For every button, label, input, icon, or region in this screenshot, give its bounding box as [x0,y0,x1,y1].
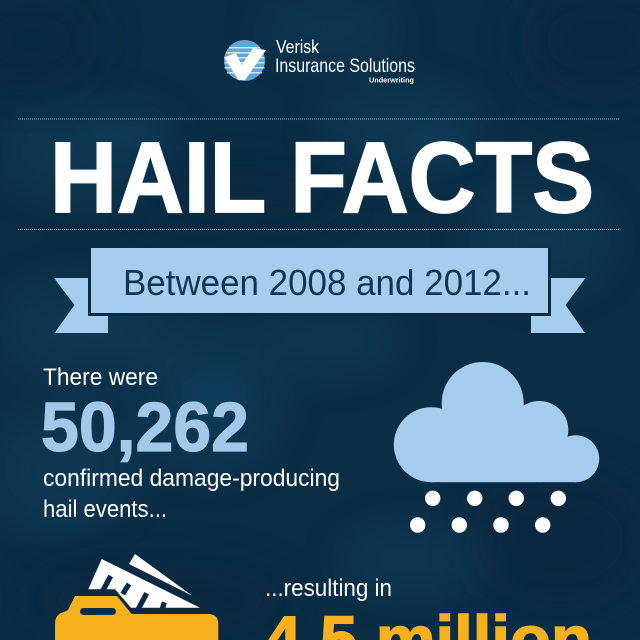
bottom dotted rule [18,228,620,230]
ribbon main panel [91,248,548,313]
white triangular sheet [129,554,192,596]
logo wordmark: Underwriting [369,78,414,84]
ribbon banner [54,248,586,333]
logo: Verisk Insurance Solutions Underwriting [224,36,415,84]
icon: claims folder with documents [55,554,218,640]
ribbon left tail [54,278,108,333]
description text: hail events... [43,496,167,523]
big number: 50,262 [41,388,249,466]
icon: hail cloud [394,362,599,533]
hailstones [410,491,566,533]
description text: confirmed damage-producing [43,465,340,492]
stat: resulting claims [264,575,592,640]
logo wordmark [275,36,415,84]
banner text: Between 2008 and 2012... [123,262,531,303]
ribbon fold shadows [88,248,551,316]
cloud [394,362,599,482]
logo wordmark: Verisk [276,36,320,57]
lead-in text: ...resulting in [265,575,392,602]
ribbon right tail [531,278,586,333]
title: HAIL FACTS [50,122,594,234]
lead-in text: There were [43,364,158,391]
ruler-shaped white sheet [88,559,200,609]
logo wordmark: Insurance Solutions [275,55,415,77]
folder slot [80,608,116,615]
stat: hail events [41,364,340,523]
folder body [55,596,218,640]
icon: striped globe with check mark [224,40,266,81]
description text [43,465,340,523]
top dotted rule [18,118,620,120]
